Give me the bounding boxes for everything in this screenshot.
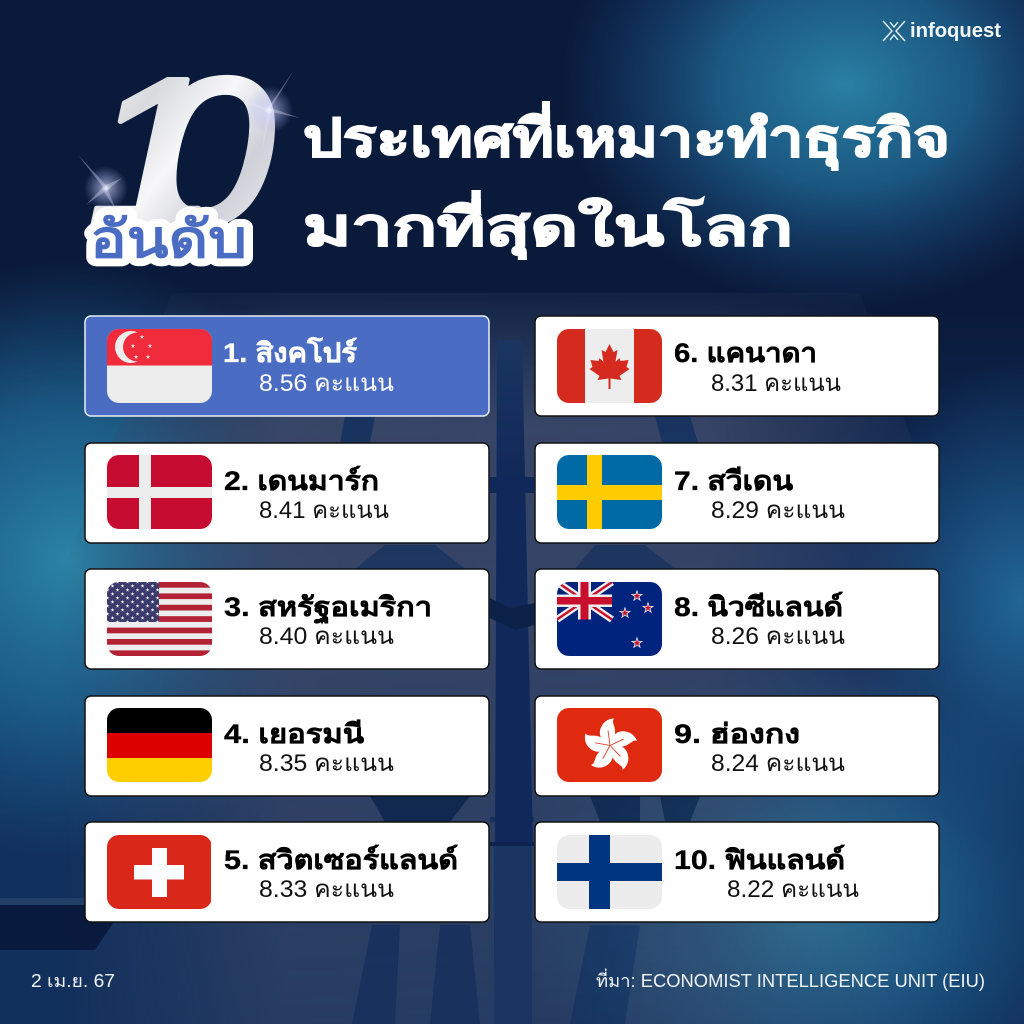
title: ประเทศที่เหมาะทำธุรกิจ: [303, 102, 950, 171]
logo: infoquest: infoquest: [910, 20, 1001, 42]
card 1: Singapore: 1. สิงคโปร์: [223, 336, 358, 368]
big silver number 10: 10: [87, 35, 274, 269]
flag: Switzerland: [107, 835, 211, 909]
flag: Hong Kong: [557, 708, 662, 783]
card 1: Singapore: [85, 316, 489, 416]
card 7: Sweden: 8.29 คะแนน: [711, 497, 845, 524]
card 10: Finland: [535, 822, 939, 922]
flag: Denmark: [107, 455, 212, 530]
card 7: Sweden: 7. สวีเดน: [674, 466, 794, 496]
card 6: Canada: [535, 316, 939, 416]
sparkles: [78, 70, 300, 210]
flag: Finland: [557, 835, 662, 911]
card 9: Hong Kong: 8.24 คะแนน: [711, 750, 845, 777]
card 3: United States: 3. สหรัฐอเมริกา: [224, 592, 432, 625]
card 2: Denmark: [85, 443, 489, 543]
badge: 10 อันดับ: [78, 35, 300, 269]
footer: date: 2 เม.ย. 67: [31, 971, 115, 991]
card 4: Germany: [85, 696, 489, 796]
flag: United States: [107, 582, 212, 656]
flag: Singapore: [107, 329, 212, 403]
flag: Sweden: [557, 455, 662, 530]
flag: New Zealand: [557, 582, 662, 657]
card 8: New Zealand: [535, 569, 939, 669]
card 6: Canada: 8.31 คะแนน: [711, 370, 841, 397]
card 2: Denmark: 8.41 คะแนน: [259, 497, 389, 524]
card 4: Germany: 4. เยอรมนี: [224, 719, 365, 749]
card 1: Singapore: 8.56 คะแนน: [259, 370, 394, 397]
card 3: United States: [85, 569, 489, 669]
card 10: Finland: 10. ฟินแลนด์: [674, 844, 845, 875]
card 7: Sweden: [535, 443, 939, 543]
title: [303, 102, 950, 260]
card 2: Denmark: 2. เดนมาร์ก: [224, 465, 379, 496]
card 5: Switzerland: 8.33 คะแนน: [259, 876, 394, 903]
card 4: Germany: 8.35 คะแนน: [259, 750, 394, 777]
title: มากที่สุดในโลก: [303, 191, 793, 260]
card 9: Hong Kong: 9. ฮ่องกง: [674, 719, 800, 749]
card 8: New Zealand: 8. นิวซีแลนด์: [674, 591, 843, 622]
flag: Canada: [557, 329, 662, 403]
pillar: [495, 340, 533, 845]
word อันดับ: อันดับ: [90, 211, 247, 269]
card 3: United States: 8.40 คะแนน: [259, 623, 394, 650]
card 10: Finland: 8.22 คะแนน: [727, 876, 859, 903]
card 6: Canada: 6. แคนาดา: [674, 338, 817, 368]
card 8: New Zealand: 8.26 คะแนน: [711, 623, 845, 650]
card 5: Switzerland: 5. สวิตเซอร์แลนด์: [224, 844, 458, 875]
card 5: Switzerland: [85, 822, 489, 922]
flag: Germany: [107, 708, 212, 783]
card 9: Hong Kong: [535, 696, 939, 796]
footer: source: ที่มา: ECONOMIST INTELLIGENCE UNIT (EIU): [596, 968, 985, 991]
